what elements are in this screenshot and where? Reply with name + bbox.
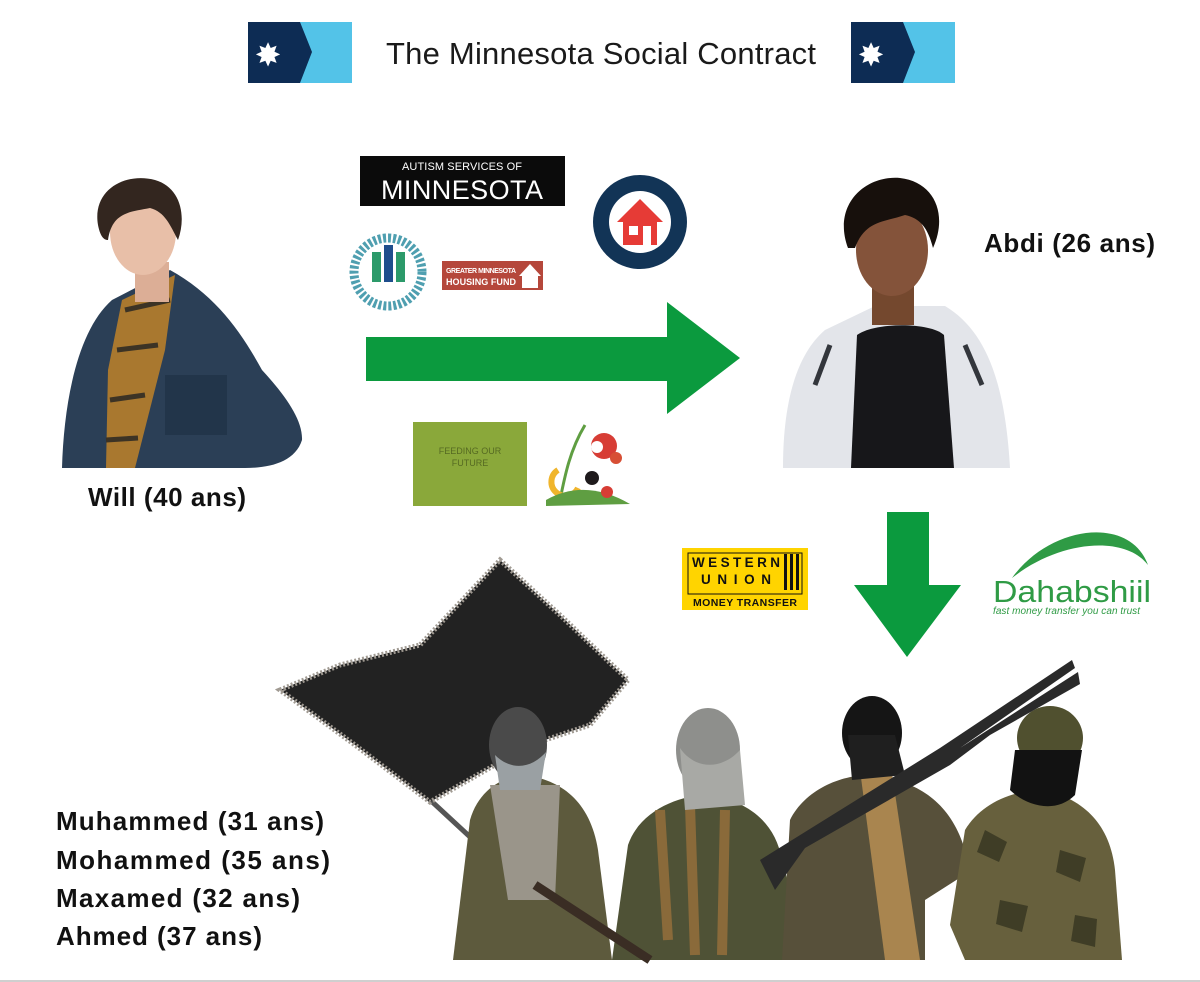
illustration: four armed figures	[453, 660, 1122, 960]
figure: Abdi	[783, 178, 1010, 468]
logo: Feeding Our Future: FEEDING OUR	[439, 446, 502, 456]
logo: Greater Minnesota Housing Fund: GREATER MINNESOTA	[446, 268, 516, 275]
logo: Western Union	[682, 548, 808, 610]
arrow: Abdi to recipients	[854, 512, 961, 657]
illustration: dark flag without insignia	[280, 560, 628, 848]
arrow: Will to Abdi	[366, 302, 740, 414]
illustration: vegetables	[546, 425, 630, 506]
rifle	[760, 660, 1080, 890]
logo: Dahabshiil: fast money transfer you can trust	[993, 606, 1141, 617]
figure 1	[453, 707, 612, 960]
label: Abdi: Abdi (26 ans)	[984, 228, 1155, 258]
icon: left state flag	[248, 22, 352, 83]
names list: Maxamed (32 ans)	[56, 883, 300, 913]
icon: left state flag: ✸	[255, 37, 281, 73]
figure 3	[782, 696, 972, 960]
logo: Feeding Our Future	[413, 422, 527, 506]
figure 4	[950, 706, 1122, 960]
figure: Will	[62, 178, 302, 468]
logo: Dahabshiil: Dahabshiil	[993, 574, 1151, 609]
names list	[56, 806, 330, 951]
logo: Western Union: WESTERN	[692, 555, 780, 570]
logo: Autism Services of Minnesota	[360, 156, 565, 206]
logo: Autism Services of Minnesota: AUTISM SERVICES OF	[402, 161, 522, 173]
names list: Mohammed (35 ans)	[56, 845, 330, 875]
logo: Minnesota One-Stop for Communities	[593, 175, 687, 269]
icon: right state flag	[851, 22, 955, 83]
logo: Greater Minnesota Housing Fund: HOUSING FUND	[446, 277, 516, 287]
logo: Dahabshiil	[993, 532, 1151, 617]
names list: Muhammed (31 ans)	[56, 806, 324, 836]
title: The Minnesota Social Contract	[386, 36, 816, 71]
icon: right state flag: ✸	[858, 37, 884, 73]
names list: Ahmed (37 ans)	[56, 921, 262, 951]
logo: Feeding Our Future: FUTURE	[452, 458, 488, 468]
figure 2	[612, 708, 810, 960]
logo: US Department of Housing and Urban Development	[354, 238, 422, 306]
logo: Western Union: UNION	[701, 572, 771, 587]
logo: Western Union: MONEY TRANSFER	[693, 597, 797, 609]
lower rifle	[535, 885, 650, 960]
label: Will: Will (40 ans)	[88, 482, 246, 512]
logo: Autism Services of Minnesota: MINNESOTA	[381, 175, 543, 205]
logo: Greater Minnesota Housing Fund	[442, 261, 543, 290]
